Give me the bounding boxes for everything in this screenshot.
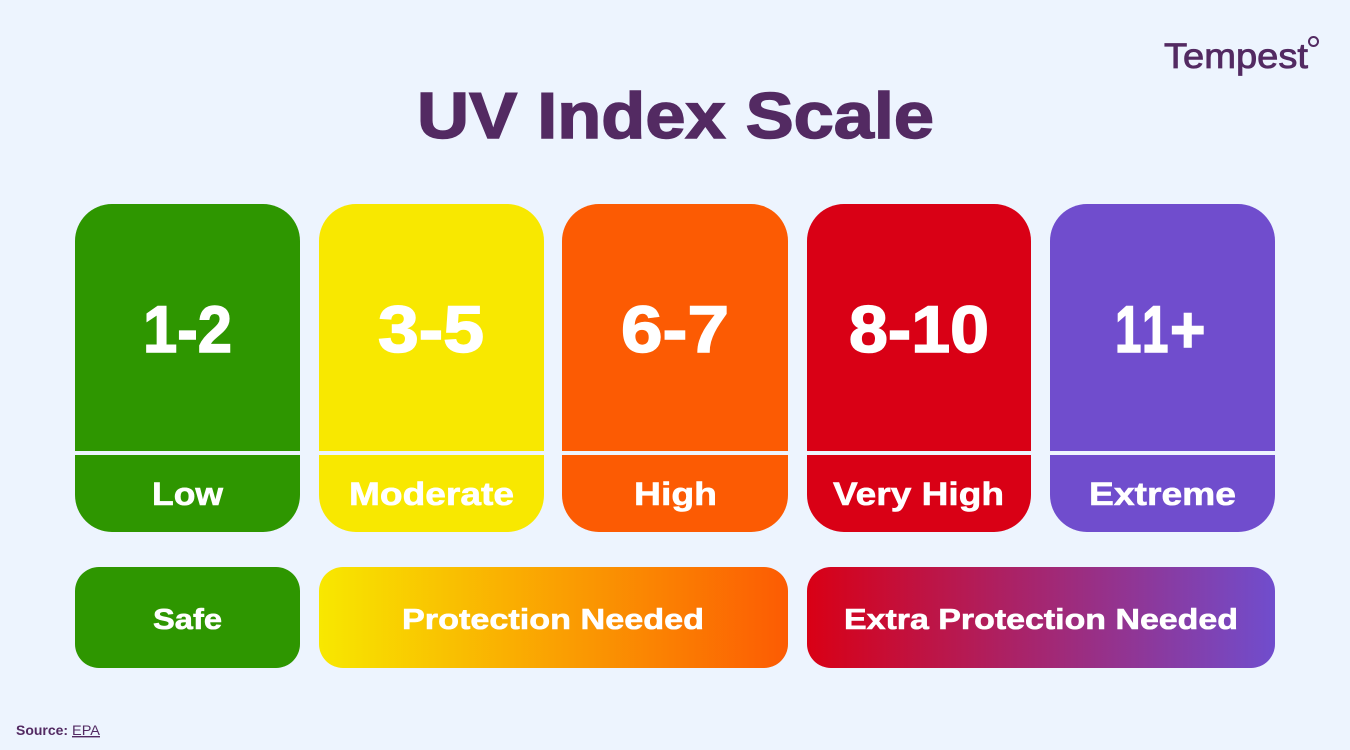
logo: Tempest: Tempest: [1164, 37, 1308, 76]
card: high: [562, 204, 788, 532]
card: high: 6-7: [621, 292, 729, 366]
card: low: [75, 204, 300, 532]
card: high: High: [634, 476, 717, 512]
source: EPA: [72, 722, 101, 738]
card: extreme: 1: [1142, 293, 1168, 367]
band: safe: [75, 567, 300, 668]
card: moderate: Moderate: [349, 476, 514, 512]
card: low: 1-2: [143, 292, 232, 366]
source: [16, 722, 101, 738]
title: UV Index Scale: [417, 79, 934, 152]
band: safe: Safe: [153, 604, 222, 636]
card: extreme: 1: [1115, 293, 1141, 367]
card: extreme: [1050, 204, 1275, 532]
source: Source:: [16, 722, 68, 738]
card: moderate: [319, 204, 544, 532]
card: very high: [807, 204, 1031, 532]
band: extra protection needed: Extra Protection Needed: [844, 604, 1238, 636]
card: very high: 8-10: [849, 292, 989, 366]
card: extreme: +: [1170, 294, 1205, 367]
card: extreme: Extreme: [1089, 476, 1236, 512]
card: low: Low: [152, 476, 223, 512]
band: protection needed: Protection Needed: [402, 604, 704, 636]
band: extra protection needed: [807, 567, 1275, 668]
card: very high: Very High: [833, 476, 1004, 512]
band: protection needed: [319, 567, 788, 668]
card: moderate: 3-5: [378, 292, 484, 366]
